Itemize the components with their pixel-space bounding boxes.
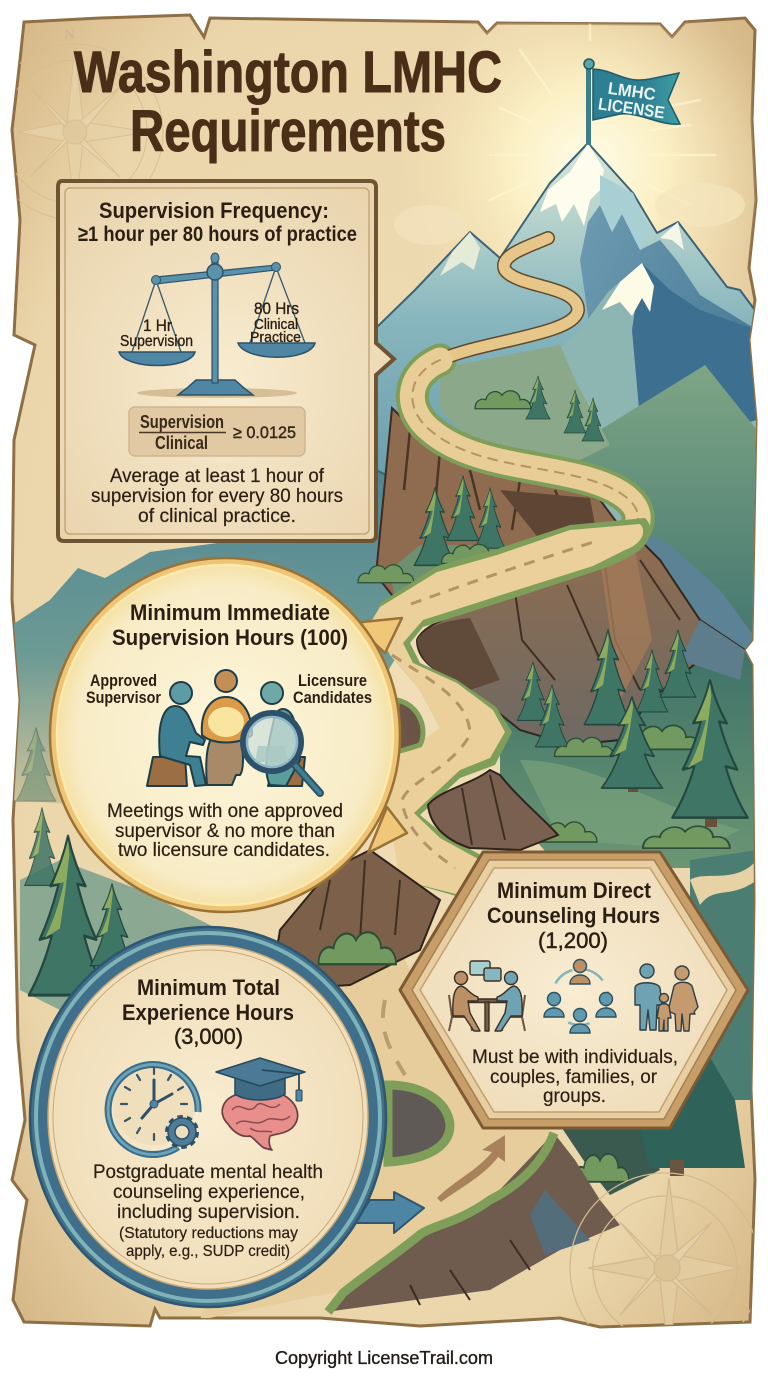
green hills right [580, 365, 756, 643]
lower trail dashes [383, 1000, 405, 1075]
left blue hills [14, 472, 394, 804]
formula box: Clinical [155, 433, 208, 453]
winding road lower [372, 518, 650, 900]
direct counseling description: couples, families, or [490, 1066, 657, 1088]
immediate supervision description: supervisor & no more than [115, 820, 335, 842]
brown cliff right [417, 535, 745, 745]
middle small cliff [428, 770, 558, 850]
immediate supervision description [107, 800, 343, 861]
heading: direct counseling: (1,200) [538, 928, 608, 953]
arrow: from experience panel to trail [355, 1192, 424, 1233]
left pine ghost tree [16, 728, 56, 801]
flag: LMHC license [584, 59, 680, 145]
right strip behind hexagon [690, 850, 757, 1100]
supervision frequency description: of clinical practice. [138, 505, 296, 527]
copyright line: Copyright LicenseTrail.com [275, 1348, 493, 1368]
green hollow with pines [440, 345, 610, 470]
icon: individual counseling at table [449, 961, 525, 1031]
arrow: tan trail arrow up to hexagon [437, 1135, 505, 1202]
icon: group circle [544, 960, 616, 1033]
icon: balance scale [119, 253, 315, 398]
panel: immediate supervision [39, 547, 411, 923]
heading: total experience: Experience Hours [122, 1000, 294, 1025]
formula box: Supervision [140, 412, 224, 432]
heading: direct counseling: Counseling Hours [487, 903, 660, 928]
lower right pines [563, 1059, 745, 1195]
formula box [129, 407, 305, 456]
label: licensure candidates [293, 671, 372, 707]
blue mountain range [376, 143, 757, 660]
scale label: one hour supervision [120, 316, 193, 350]
heading: immediate supervision: Supervision Hours (100) [112, 625, 348, 650]
lower left pines [20, 807, 212, 1010]
icon: magnifying glass [243, 713, 320, 793]
direct counseling description: groups. [543, 1085, 606, 1107]
scale label: one hour supervision: Supervision [120, 333, 193, 350]
icon: supervisor and candidates meeting [147, 670, 305, 786]
statutory reductions note [119, 1225, 298, 1260]
heading: immediate supervision [112, 600, 348, 650]
compass rose bottom right [569, 1172, 754, 1326]
icon: clock with gear [108, 1063, 198, 1155]
heading: total experience: Minimum Total [137, 975, 280, 1000]
immediate supervision description: Meetings with one approved [107, 800, 343, 822]
statutory reductions note: (Statutory reductions may [119, 1225, 298, 1242]
lower dark cave [388, 1085, 450, 1162]
panel: total experience hours [30, 927, 386, 1307]
scale label: eighty hours clinical practice: Practice [250, 329, 301, 346]
label: approved supervisor [86, 671, 161, 707]
lower sandy path area [200, 950, 552, 1320]
supervision frequency description [91, 465, 343, 527]
immediate supervision description: two licensure candidates. [118, 839, 330, 861]
title: Washington LMHC [74, 40, 502, 105]
statutory reductions note: apply, e.g., SUDP credit) [126, 1243, 290, 1260]
icon: brain with graduation cap [216, 1058, 305, 1150]
forest floor [500, 650, 757, 868]
upper cliff [358, 408, 630, 605]
formula box: ≥ 0.0125 [233, 423, 296, 442]
total experience description: counseling experience, [113, 1181, 305, 1203]
flag: LMHC license: LMHC [607, 79, 657, 104]
lower right cliff [328, 1133, 620, 1312]
label: licensure candidates: Candidates [293, 688, 372, 707]
compass north letter: N [64, 27, 75, 43]
icon: family [635, 964, 698, 1031]
heading: immediate supervision: Minimum Immediate [130, 600, 330, 625]
small cave by panel [397, 700, 423, 752]
winding road upper [412, 238, 638, 600]
panel: supervision frequency [58, 181, 394, 541]
scale label: eighty hours clinical practice: 80 Hrs [254, 299, 299, 318]
label: approved supervisor: Supervisor [86, 688, 161, 707]
title [74, 40, 502, 164]
heading: total experience [122, 975, 294, 1049]
panel: direct counseling hours [400, 852, 748, 1128]
scale label: eighty hours clinical practice: Clinical [254, 316, 298, 333]
title: Requirements [130, 99, 446, 164]
forest pines [517, 630, 748, 848]
heading: supervision frequency: Supervision Frequency: [99, 198, 329, 223]
total experience description: including supervision. [117, 1201, 300, 1223]
heading: total experience: (3,000) [174, 1024, 243, 1049]
heading: supervision frequency: ≥1 hour per 80 hours of practice [78, 222, 357, 246]
glow halo [39, 547, 411, 923]
scale label: one hour supervision: 1 Hr [143, 316, 172, 335]
label: approved supervisor: Approved [90, 671, 157, 690]
central lower cliff [270, 850, 440, 990]
total experience description [93, 1161, 323, 1223]
total experience description: Postgraduate mental health [93, 1161, 323, 1183]
supervision frequency description: Average at least 1 hour of [110, 465, 325, 487]
heading: direct counseling [487, 878, 660, 953]
label: licensure candidates: Licensure [298, 671, 367, 690]
direct counseling description [472, 1046, 678, 1107]
scale label: eighty hours clinical practice [250, 299, 301, 346]
supervision frequency description: supervision for every 80 hours [91, 485, 343, 507]
compass rose top left [16, 46, 164, 218]
right blue slope [646, 536, 752, 700]
flag: LMHC license: LICENSE [597, 94, 666, 122]
heading: supervision frequency [78, 198, 357, 246]
direct counseling description: Must be with individuals, [472, 1046, 678, 1068]
sun glow and rays [394, 22, 756, 256]
heading: direct counseling: Minimum Direct [497, 878, 651, 903]
